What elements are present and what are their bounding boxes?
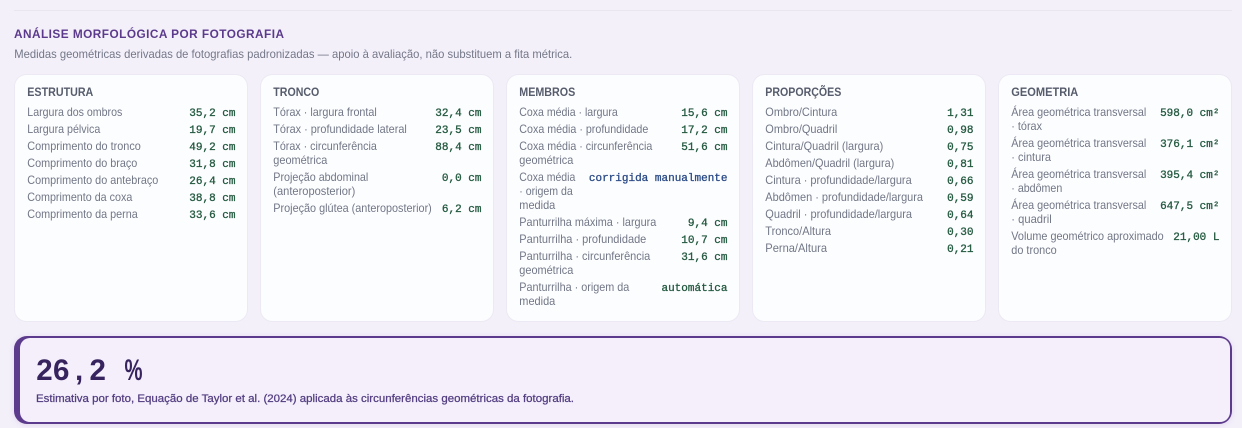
panel: tronco: 32,4 cm [435, 108, 482, 120]
panel: tronco: geométrica [273, 153, 328, 167]
panel: estrutura: Largura pélvica [27, 122, 101, 136]
panel: tronco: 88,4 cm [435, 142, 482, 154]
panel: membros: Panturrilha · circunferência [519, 249, 651, 263]
panel: tronco: Tórax · circunferência [273, 139, 377, 153]
panel heading: proporções: PROPORÇÕES [765, 86, 842, 99]
panel: estrutura: 26,4 cm [189, 176, 236, 188]
panel: tronco: (anteroposterior) [273, 184, 355, 198]
panel: estrutura: 33,6 cm [189, 210, 236, 222]
panel: proporções [752, 74, 986, 322]
panel: membros: Coxa média · profundidade [519, 122, 649, 136]
panel: membros: 31,6 cm [681, 252, 728, 264]
big value [36, 354, 142, 387]
panel: geometria: Área geométrica transversal [1011, 136, 1146, 150]
panel: proporções: Abdômen/Quadril (largura) [765, 156, 894, 170]
panel: membros: Panturrilha máxima · largura [519, 215, 657, 229]
panel: geometria: 395,4 cm² [1160, 170, 1220, 182]
panel: membros: Panturrilha · origem da [519, 280, 630, 294]
panel: membros: medida [519, 198, 556, 212]
panel: geometria: Área geométrica transversal [1011, 105, 1146, 119]
panel: geometria: · quadril [1011, 212, 1052, 226]
panel: geometria: · abdômen [1011, 181, 1062, 195]
panel: estrutura: Comprimento do braço [27, 156, 138, 170]
panel: proporções: 0,98 [947, 125, 974, 137]
heading: ANÁLISE MORFOLÓGICA POR FOTOGRAFIA [14, 27, 284, 41]
panel: membros: 15,6 cm [681, 108, 728, 120]
panel: proporções: Tronco/Altura [765, 224, 831, 238]
panel: membros: 10,7 cm [681, 235, 728, 247]
panel: geometria: 21,00 L [1173, 232, 1220, 244]
panel: proporções: Ombro/Cintura [765, 105, 838, 119]
callout: estimate [14, 336, 1232, 424]
panel: estrutura: Comprimento do tronco [27, 139, 141, 153]
panel: proporções: Ombro/Quadril [765, 122, 837, 136]
panel: tronco: Projeção abdominal [273, 170, 368, 184]
panel: membros: geométrica [519, 263, 574, 277]
big value: , [75, 354, 83, 387]
panel: membros [506, 74, 740, 322]
panel heading: membros: MEMBROS [519, 87, 576, 99]
panel: tronco: 0,0 cm [442, 173, 482, 185]
panel: geometria: · tórax [1011, 119, 1042, 133]
panel: estrutura [14, 74, 248, 322]
panel heading: geometria: GEOMETRIA [1011, 87, 1078, 99]
panel: estrutura: 19,7 cm [189, 125, 236, 137]
panel: geometria: Área geométrica transversal [1011, 167, 1146, 181]
panel: proporções: 0,59 [947, 193, 974, 205]
panel: proporções: 0,64 [947, 210, 974, 222]
panel: tronco: Tórax · profundidade lateral [273, 122, 407, 136]
panel: geometria: · cintura [1011, 150, 1051, 164]
big value: 26 [36, 354, 69, 387]
panel: proporções: 0,30 [947, 227, 974, 239]
panel: proporções: 0,66 [947, 176, 974, 188]
panel: estrutura: Comprimento da coxa [27, 190, 133, 204]
panel: tronco: Tórax · largura frontal [273, 105, 377, 119]
panel: membros: medida [519, 294, 556, 308]
panel: membros: corrigida manualmente [589, 173, 728, 185]
panel: membros: · origem da [519, 184, 573, 198]
panel: geometria: 647,5 cm² [1160, 201, 1220, 213]
panel: membros: 9,4 cm [688, 218, 728, 230]
panel: membros: Panturrilha · profundidade [519, 232, 647, 246]
panel: geometria: 598,0 cm² [1160, 108, 1220, 120]
big value: 2 [90, 354, 106, 387]
panel: estrutura: Comprimento da perna [27, 207, 138, 221]
panel heading: estrutura: ESTRUTURA [27, 87, 93, 99]
panel: proporções: Quadril · profundidade/largura [765, 207, 912, 221]
panel: proporções: Abdômen · profundidade/largura [765, 190, 923, 204]
panel: geometria: Área geométrica transversal [1011, 198, 1146, 212]
panel: proporções: Perna/Altura [765, 241, 827, 255]
panel: proporções: 1,31 [947, 108, 974, 120]
panel heading: tronco: TRONCO [273, 87, 319, 99]
panel: membros: automática [661, 283, 728, 295]
panel: estrutura: 31,8 cm [189, 159, 236, 171]
panel: membros: Coxa média [519, 170, 576, 184]
panel: membros: Coxa média · largura [519, 105, 618, 119]
panel: geometria: 376,1 cm² [1160, 139, 1220, 151]
panel: proporções: 0,21 [947, 244, 974, 256]
panel: estrutura: 38,8 cm [189, 193, 236, 205]
big value: % [124, 354, 142, 387]
panel: proporções: Cintura/Quadril (largura) [765, 139, 883, 153]
panel: membros: geométrica [519, 153, 574, 167]
panel: estrutura: 49,2 cm [189, 142, 236, 154]
panel: geometria [998, 74, 1232, 322]
panel: tronco [260, 74, 494, 322]
panel: tronco: Projeção glútea (anteroposterior) [273, 201, 432, 215]
subtitle: Medidas geométricas derivadas de fotografias padronizadas — apoio à avaliação, não substituem a fita métrica. [14, 48, 572, 61]
panel: proporções: Cintura · profundidade/largura [765, 173, 912, 187]
panel: estrutura: Largura dos ombros [27, 105, 122, 119]
panel: tronco: 23,5 cm [435, 125, 482, 137]
panel: proporções: 0,75 [947, 142, 974, 154]
panel: membros: Coxa média · circunferência [519, 139, 653, 153]
panel: geometria: do tronco [1011, 243, 1057, 257]
caption: Estimativa por foto, Equação de Taylor et al. (2024) aplicada às circunferências geométricas da fotografia. [36, 393, 574, 405]
panel: membros: 51,6 cm [681, 142, 728, 154]
panel: membros: 17,2 cm [681, 125, 728, 137]
panel: estrutura: 35,2 cm [189, 108, 236, 120]
panel: proporções: 0,81 [947, 159, 974, 171]
panel: geometria: Volume geométrico aproximado [1011, 229, 1164, 243]
panel: estrutura: Comprimento do antebraço [27, 173, 159, 187]
panel: tronco: 6,2 cm [442, 204, 482, 216]
